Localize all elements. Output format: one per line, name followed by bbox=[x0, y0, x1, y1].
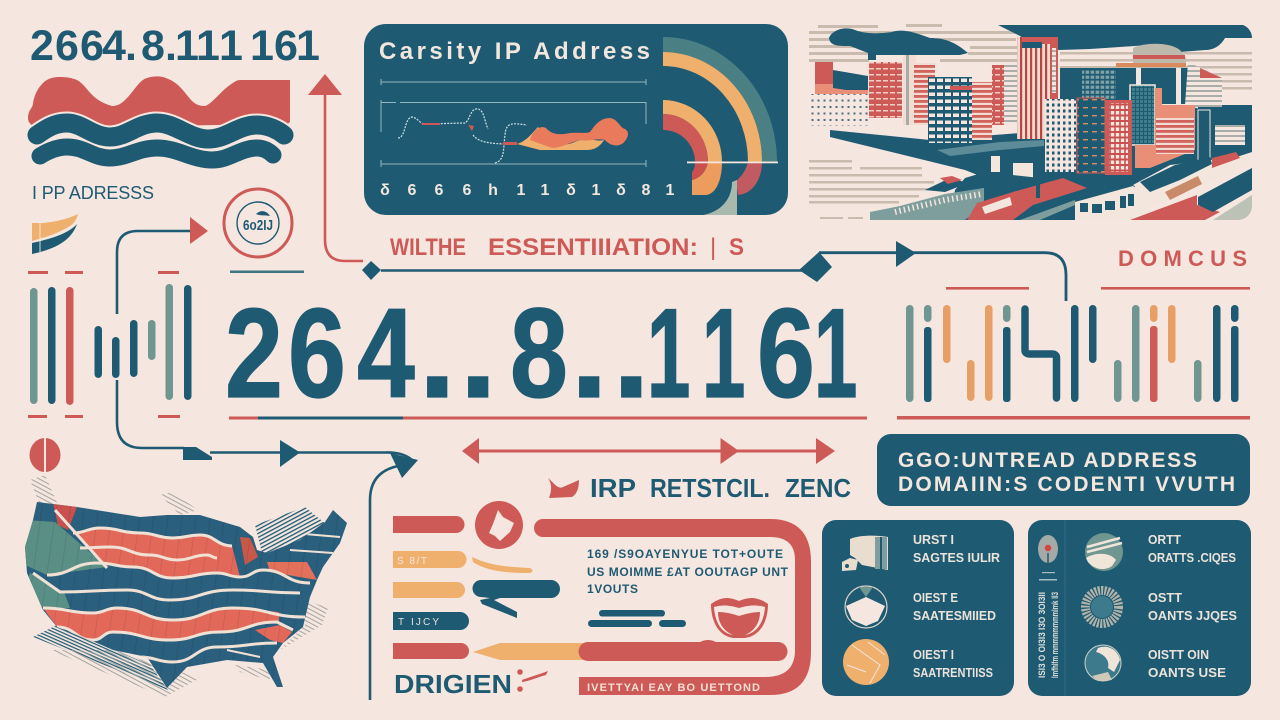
icon: circular seal bbox=[224, 189, 292, 257]
label: ip restcil zenc: ZENC bbox=[785, 473, 851, 503]
illustration: city skyline bbox=[809, 24, 1252, 220]
arrow: red up arrow bbox=[308, 74, 363, 261]
body text: 1VOUTS bbox=[587, 582, 638, 596]
text: row 3 bbox=[913, 647, 993, 680]
crimson and cream tower bbox=[992, 65, 1004, 125]
icon: red circle split bbox=[30, 437, 60, 473]
icon: mixed ball bbox=[1085, 645, 1121, 681]
gray background lines bbox=[809, 24, 1252, 219]
text: row 3: OIEST I bbox=[913, 647, 954, 662]
underline main number bbox=[229, 416, 867, 420]
striped tower bbox=[903, 55, 916, 125]
chart: area blob bbox=[517, 118, 628, 150]
panel: geo untread address bbox=[877, 434, 1250, 506]
icon: gray ellipse with red dot bbox=[1038, 535, 1058, 563]
main number: 6 bbox=[288, 282, 346, 424]
label: ip restcil zenc bbox=[590, 473, 851, 503]
icon: textured ring bbox=[1086, 590, 1118, 624]
map: united states bbox=[20, 475, 355, 697]
icon: mouth bbox=[711, 598, 768, 638]
main number: 1 bbox=[647, 283, 690, 425]
arrow: navy flow to lower section bbox=[117, 380, 418, 700]
cap building bbox=[1133, 44, 1186, 68]
main number: . bbox=[418, 275, 456, 426]
lower left buildings bbox=[870, 188, 984, 220]
icon: flag swoosh bbox=[32, 214, 78, 254]
pill: orange labelled: S 8/T bbox=[397, 556, 427, 567]
red tower bbox=[869, 62, 902, 118]
text: row 1 bbox=[913, 532, 1001, 565]
label: essentiation: ESSENTIIIATION: bbox=[488, 234, 698, 261]
text placeholder bars bbox=[588, 610, 686, 627]
text: row 2: OSTT bbox=[1148, 590, 1182, 605]
main number: 2 bbox=[225, 282, 283, 424]
pill: navy labelled: T IJCY bbox=[398, 617, 439, 628]
text: row 3: OANTS USE bbox=[1148, 665, 1226, 680]
map hatching bbox=[30, 475, 328, 697]
arrow: double red bbox=[462, 438, 835, 464]
panel text line 1: GGO:UNTREAD ADDRESS bbox=[898, 449, 1197, 472]
swoosh: orange bbox=[472, 557, 532, 573]
icon: layered waves bbox=[28, 76, 290, 160]
icon: polygon ball bbox=[845, 586, 887, 628]
top navy sky bbox=[998, 25, 1252, 52]
text: row 1: URST I bbox=[913, 532, 954, 547]
main number: 8 bbox=[510, 282, 568, 424]
chart: right bars bbox=[897, 287, 1250, 420]
coral stripes building bbox=[1135, 88, 1195, 168]
label: essentiation bbox=[390, 234, 744, 261]
icon: red flag bbox=[548, 478, 579, 498]
text: row 2: SAATESMIIED bbox=[913, 608, 996, 623]
chart: dashed line bbox=[398, 109, 527, 163]
text: row 3: SAATRENTIISS bbox=[913, 665, 993, 680]
label: essentiation: S bbox=[729, 234, 744, 261]
pointer: navy pill bbox=[472, 580, 560, 618]
bar: red bbox=[578, 640, 788, 661]
main number: . bbox=[570, 275, 608, 426]
pill: red top bbox=[393, 516, 464, 533]
panel title: Carsity IP Address bbox=[379, 38, 650, 65]
body text: US MOIMME £AT OOUTAGP UNT bbox=[587, 565, 789, 579]
icon: orange ball bbox=[843, 639, 889, 685]
navy window tower bbox=[928, 77, 972, 143]
main number bbox=[225, 275, 857, 426]
sidebar vertical text bbox=[1037, 592, 1060, 678]
arrow: orange pointer bbox=[473, 643, 590, 660]
pill: red bottom bbox=[393, 643, 469, 659]
label: ip restcil zenc: RETSTCIL. bbox=[650, 473, 770, 503]
text: row 3 bbox=[1148, 647, 1226, 680]
icon: building bbox=[842, 536, 888, 571]
sidebar vertical text: ISI3 O OI3I3 I3O 3OI3II bbox=[1037, 592, 1047, 678]
tall red tower bbox=[1017, 37, 1050, 139]
main number: 6 bbox=[757, 282, 815, 424]
label: essentiation: | bbox=[710, 234, 716, 261]
small title: address number: 2664.8.111 161 bbox=[30, 22, 320, 70]
text: row 2 bbox=[913, 590, 996, 623]
text: row 2: OIEST E bbox=[913, 590, 958, 605]
text: row 1: ORTT bbox=[1148, 532, 1181, 547]
chart: axis numbers: δ666h11δ1δ81 bbox=[380, 182, 675, 199]
navy mid block bbox=[1060, 68, 1190, 104]
panel text line 2: DOMAIIN:S CODENTI VVUTH bbox=[898, 473, 1235, 496]
right navy block bbox=[1198, 107, 1252, 156]
main number: . bbox=[612, 275, 650, 426]
icon: circular seal: 6o2IJ bbox=[243, 217, 273, 234]
connector: diamonds to domains bbox=[362, 241, 1066, 301]
label: essentiation: WILTHE bbox=[390, 234, 466, 261]
panel: bottom center flow bbox=[393, 501, 811, 699]
arcs bbox=[663, 37, 778, 215]
label: ip restcil zenc: IRP bbox=[590, 473, 636, 503]
frame: red loop with caption bbox=[534, 519, 811, 695]
main number: 1 bbox=[814, 283, 857, 425]
panel: bottom right second bbox=[1028, 520, 1251, 696]
panel: bottom right first bbox=[822, 520, 1014, 696]
text: row 1: SAGTES IULIR bbox=[913, 550, 1001, 565]
panel: carsity ip address bbox=[364, 24, 788, 215]
icon: red circle bbox=[475, 501, 523, 549]
left cloud bbox=[829, 28, 968, 60]
main number: . bbox=[460, 275, 497, 426]
main number: 4 bbox=[357, 282, 415, 424]
chart axes bbox=[381, 79, 646, 167]
ground pillars bbox=[991, 156, 1000, 172]
pill: orange labelled bbox=[393, 551, 466, 568]
pill: orange bbox=[393, 582, 465, 598]
divider above main number bbox=[230, 270, 304, 273]
text: row 3: OISTT OIN bbox=[1148, 647, 1209, 662]
icon: striped ball bbox=[1085, 533, 1123, 571]
small left buildings bbox=[815, 62, 833, 84]
text: row 2 bbox=[1148, 590, 1237, 623]
main number: 1 bbox=[702, 283, 745, 425]
chart: red line marks bbox=[422, 123, 517, 145]
text: row 1 bbox=[1148, 532, 1236, 565]
label: ip address: I PP ADRESSS bbox=[32, 183, 154, 203]
lower navy ground bbox=[950, 172, 1135, 220]
text: row 2: OANTS JJQES bbox=[1148, 608, 1237, 623]
text: row 1: ORATTS .CIQES bbox=[1148, 550, 1236, 565]
train band bbox=[1133, 156, 1240, 186]
front window towers bbox=[1045, 99, 1076, 172]
pill: navy labelled bbox=[393, 612, 469, 630]
label: drigien: DRIGIEN bbox=[394, 669, 512, 699]
ground wedge bbox=[830, 105, 1252, 192]
caption: IVETTYAI EAY BO UETTOND bbox=[587, 682, 760, 694]
map body bbox=[25, 502, 347, 688]
window block bbox=[1075, 186, 1135, 220]
body text bbox=[587, 547, 789, 596]
teal grid building bbox=[1130, 85, 1155, 145]
red stripe tower bbox=[972, 82, 992, 140]
arrow: navy flow to seal bbox=[117, 217, 208, 314]
body text: 169 /S9OAYENYUE TOT+OUTE bbox=[587, 547, 783, 561]
chart: left bars bbox=[28, 271, 192, 418]
heading: domains: DOMCUS bbox=[1118, 246, 1247, 271]
sidebar marks bbox=[1039, 572, 1057, 580]
bottom right red and navy bbox=[1130, 195, 1220, 220]
sidebar vertical text: lmfhlfm mmmmmmmmlmk Il3 bbox=[1050, 592, 1060, 678]
